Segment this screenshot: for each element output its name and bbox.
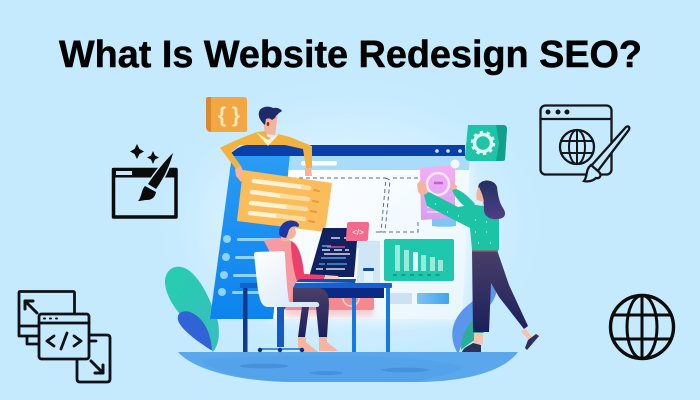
desktop monitor [19, 292, 74, 344]
under-desk pink panel [285, 285, 374, 310]
right shoe [525, 334, 539, 350]
chair [254, 251, 319, 352]
hand [325, 275, 340, 281]
window drop glow [270, 160, 472, 322]
torso [264, 238, 325, 305]
window control dots [435, 149, 462, 153]
search pill [301, 161, 337, 166]
icon: browser window with globe and brush [540, 106, 629, 181]
face [476, 187, 484, 202]
face and neck [262, 113, 278, 135]
teal gear badge [465, 125, 507, 161]
mouth [267, 122, 269, 126]
pink code tag [346, 222, 369, 241]
desk legs [243, 288, 248, 352]
pink poster [420, 165, 455, 220]
head [281, 226, 296, 241]
down-right arrow [91, 361, 103, 373]
ground platform [178, 352, 518, 382]
trousers [293, 288, 329, 337]
right plant leaves [452, 272, 498, 352]
man standing behind window [220, 107, 312, 182]
teal top with sleeves [424, 189, 499, 250]
poster lines [427, 202, 447, 212]
dashed wireframe [292, 178, 422, 232]
light card behind monitor [352, 241, 380, 283]
poster ring [427, 173, 449, 195]
orange code badge: { } [218, 104, 240, 127]
hair [259, 107, 282, 125]
monitor with code [307, 228, 358, 277]
left shoe [462, 343, 481, 352]
panel rings [343, 290, 359, 306]
woman holding pink poster [417, 160, 539, 352]
code window [39, 314, 89, 359]
chair column [277, 307, 286, 347]
sidebar list [218, 235, 287, 296]
trousers [472, 250, 528, 332]
bar chart panel [384, 239, 454, 281]
up-left arrow [25, 301, 37, 313]
left hand [417, 180, 427, 196]
chair wheels [258, 348, 304, 352]
pale blue sheet [432, 215, 456, 227]
top dots [435, 204, 491, 243]
poster minus [434, 182, 443, 184]
orange content card [237, 170, 332, 232]
collar [256, 132, 279, 146]
left plant leaves [165, 267, 219, 352]
seated man [264, 221, 356, 352]
pink panel glow [285, 304, 373, 316]
top bar [228, 145, 465, 156]
icon: window with paint brush and sparkles [112, 144, 177, 217]
blue button [417, 293, 449, 304]
desktop surface [240, 283, 392, 288]
title: What Is Website Redesign SEO? [59, 34, 642, 76]
white knob [450, 160, 460, 168]
right hand [450, 180, 457, 192]
socks and shoes [298, 337, 318, 352]
keyboard [296, 279, 356, 283]
hair [478, 180, 505, 219]
pink code tag: </> [352, 228, 364, 237]
coffee cup [363, 268, 374, 282]
hair [279, 221, 299, 238]
drawer [297, 288, 384, 298]
belt [472, 249, 498, 252]
icon: globe [610, 296, 674, 358]
phone [77, 335, 110, 382]
chair base [260, 348, 302, 350]
content area [272, 158, 470, 319]
orange code badge [206, 97, 247, 132]
desk [240, 268, 392, 352]
sweater with arms [220, 131, 312, 169]
light header [289, 156, 470, 170]
right hand [305, 168, 312, 176]
icon: responsive code screens [19, 292, 110, 382]
browser window [210, 145, 472, 322]
red front [291, 241, 325, 281]
chair back and seat [254, 251, 319, 307]
grey button [390, 293, 412, 304]
background glow [200, 120, 500, 330]
sidebar [210, 155, 290, 319]
ankles [474, 328, 533, 344]
left hand [235, 166, 245, 182]
